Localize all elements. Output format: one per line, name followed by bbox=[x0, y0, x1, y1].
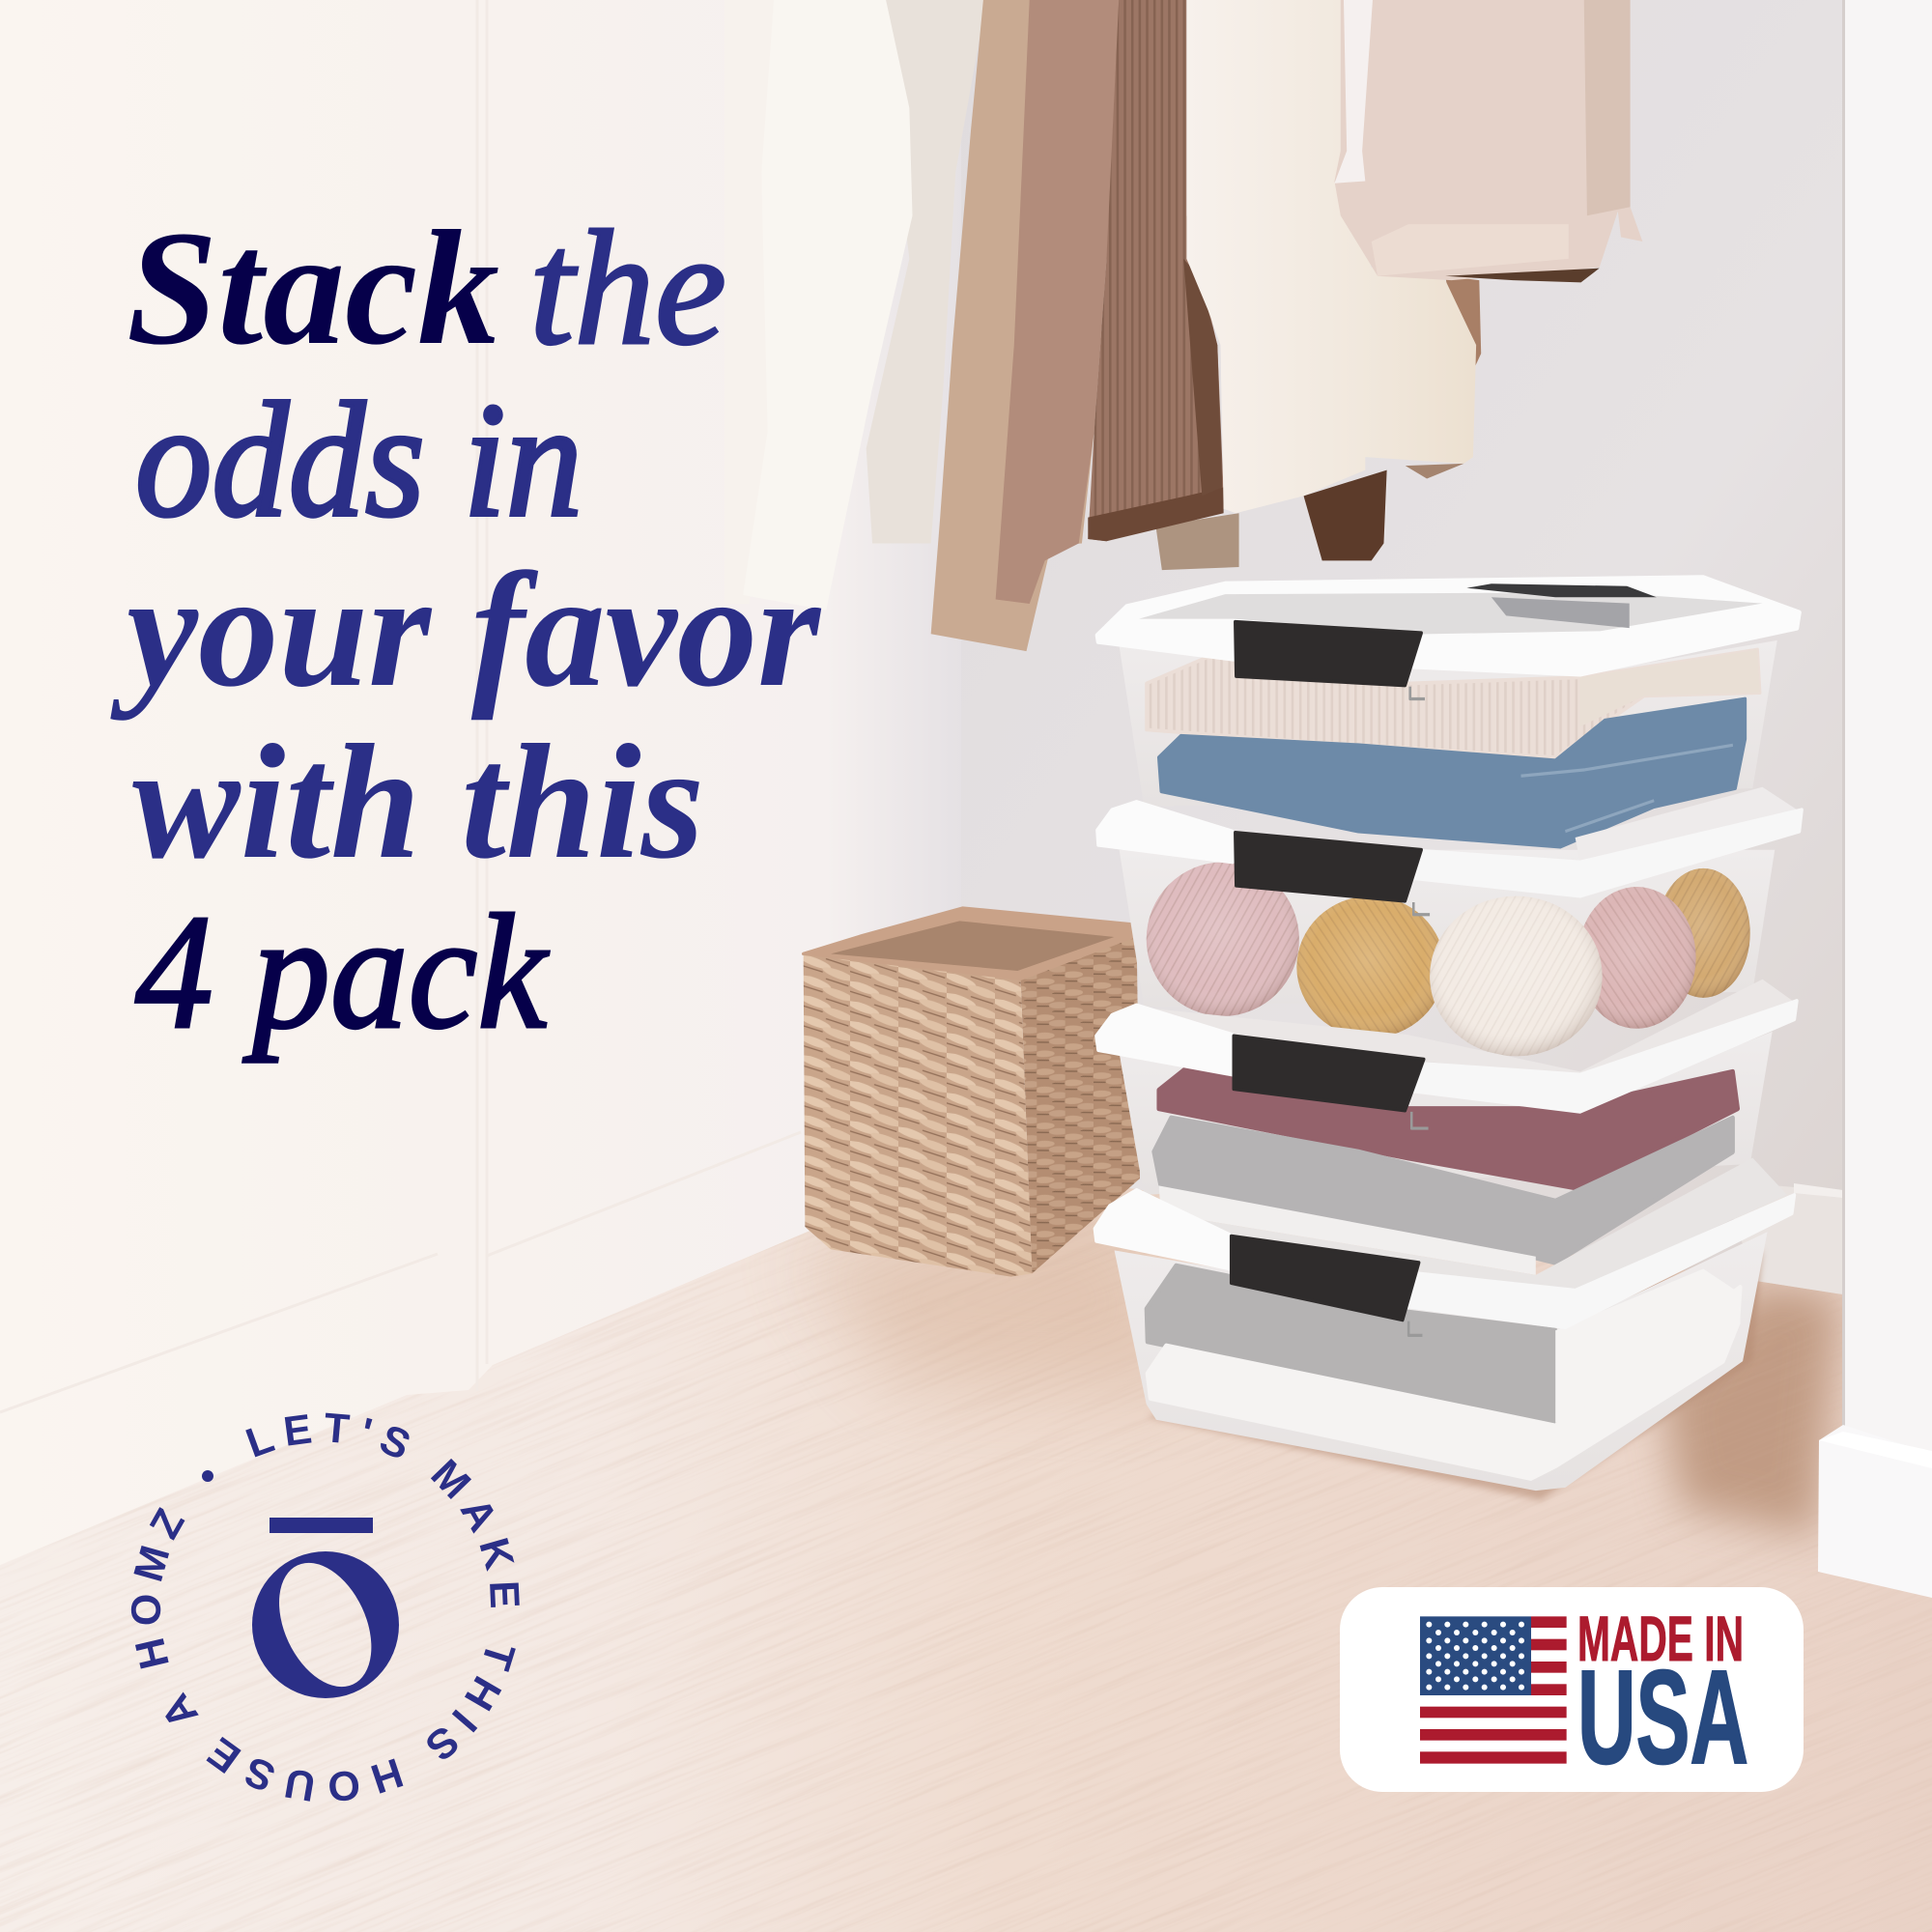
headline line 2: odds in bbox=[135, 369, 582, 551]
box 1 body bbox=[1120, 640, 1777, 807]
box 3 latch bbox=[1234, 1036, 1424, 1111]
box 2 bbox=[1097, 787, 1802, 1056]
logo bar bbox=[270, 1518, 373, 1533]
white towel bbox=[1148, 1288, 1741, 1478]
back wall bbox=[956, 0, 1855, 1314]
dark brown sleeve bbox=[1304, 470, 1387, 560]
box 3 body bbox=[1120, 1032, 1773, 1195]
box 3 lid bbox=[1096, 980, 1797, 1112]
headline line 4: with this bbox=[132, 711, 704, 893]
flag stars bbox=[1426, 1622, 1524, 1690]
box 4 lid bbox=[1094, 1158, 1795, 1327]
hanging clothes bbox=[724, 0, 1642, 651]
yarn white bbox=[1430, 896, 1603, 1056]
closet end baseboard bbox=[1818, 1425, 1932, 1598]
badge text: USA: USA bbox=[1577, 1643, 1748, 1792]
grey towel bbox=[1147, 1265, 1555, 1426]
back baseboard bbox=[1719, 1180, 1843, 1294]
box 4 bbox=[1094, 1158, 1795, 1491]
flag canton bbox=[1420, 1616, 1531, 1695]
box 3 bbox=[1096, 980, 1797, 1275]
lid handle bbox=[1466, 583, 1657, 597]
circular slogan: LET'S MAKE THIS HOUSE A HOMZ bbox=[131, 1412, 520, 1802]
cream sweater bbox=[1186, 0, 1476, 513]
tan lower strip bbox=[1155, 513, 1239, 570]
headline line 1: Stack bbox=[127, 197, 499, 379]
pale pink garment bbox=[1334, 0, 1642, 280]
box 1 lid inset bbox=[1139, 592, 1762, 635]
flag stripes bbox=[1420, 1616, 1567, 1764]
box 2 latch bbox=[1236, 833, 1421, 901]
basket left face bbox=[804, 954, 1032, 1277]
badge text: made in: MADE IN bbox=[1577, 1603, 1744, 1674]
grey blanket bbox=[1153, 1118, 1733, 1263]
brand seal bbox=[131, 1412, 520, 1802]
logo ring bbox=[252, 1551, 399, 1698]
white strap bbox=[1334, 0, 1373, 184]
closet end wall bbox=[1845, 0, 1932, 1468]
headline line 1 bbox=[127, 197, 726, 379]
headline line 5: 4 pack bbox=[135, 881, 549, 1063]
pale back garment bbox=[867, 0, 986, 543]
floor wood grain bbox=[0, 1164, 1932, 1932]
yarn pink left bbox=[1147, 863, 1299, 1016]
yarn pink right bbox=[1577, 887, 1696, 1029]
white sliver bbox=[1158, 1185, 1536, 1275]
yarn mustard back bbox=[1657, 868, 1750, 998]
dark fringe bbox=[1445, 269, 1600, 282]
american flag bbox=[1420, 1616, 1567, 1764]
badge background bbox=[1340, 1587, 1804, 1792]
blue denim bbox=[1158, 699, 1746, 847]
box 4 latch bbox=[1231, 1236, 1419, 1320]
mauve blanket bbox=[1158, 1068, 1738, 1189]
far left soft garment bbox=[724, 0, 777, 604]
white sleeve bbox=[743, 0, 913, 611]
tan cardigan bbox=[931, 0, 1125, 651]
box 2 body bbox=[1120, 850, 1775, 1007]
floor bbox=[0, 1164, 1932, 1932]
headline bbox=[109, 197, 822, 1063]
basket right face bbox=[1021, 937, 1140, 1273]
box 4 body bbox=[1115, 1232, 1768, 1491]
brown scarf bbox=[1445, 276, 1481, 378]
cabinet seam and baseboards bbox=[0, 0, 801, 1412]
left wall bbox=[0, 0, 961, 1642]
yarn mustard bbox=[1296, 896, 1444, 1037]
basket rim bbox=[804, 908, 1137, 980]
basket interior bbox=[831, 921, 1114, 971]
box 2 lid bbox=[1097, 787, 1802, 896]
slogan dot bbox=[202, 1470, 213, 1482]
brown ribbed knit bbox=[1088, 0, 1224, 541]
headline line 1: the bbox=[529, 197, 726, 379]
made in USA badge bbox=[1340, 1587, 1804, 1792]
box 4 shadow bbox=[1147, 1250, 1762, 1500]
box 1 latch bbox=[1236, 622, 1421, 685]
stack of four clear storage boxes bbox=[1094, 578, 1802, 1500]
beige sweater bbox=[1147, 649, 1760, 757]
wicker basket bbox=[804, 908, 1140, 1277]
floor shading bbox=[802, 1188, 1840, 1536]
headline line 3: your favor bbox=[109, 539, 822, 721]
box 1 lid bbox=[1097, 578, 1800, 674]
box 1 bbox=[1097, 578, 1800, 847]
